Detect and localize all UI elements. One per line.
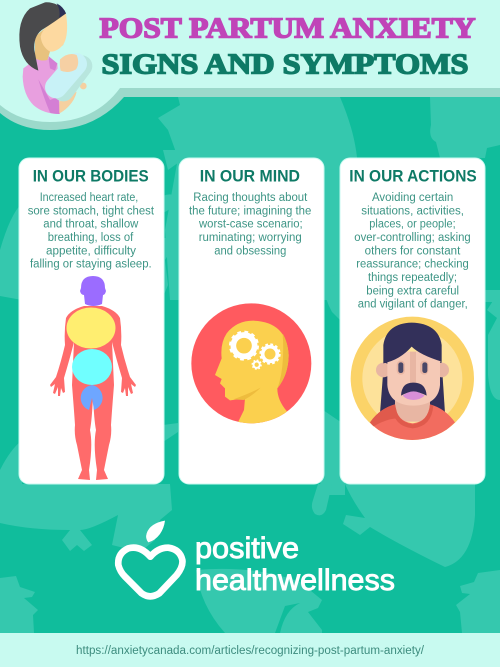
heading: IN OUR ACTIONS: [349, 168, 477, 186]
text block: appetite, difficulty: [46, 245, 136, 257]
text block: things repeatedly;: [368, 272, 457, 284]
gears: [231, 332, 279, 369]
text block: over-controlling; asking: [354, 232, 471, 244]
icon: body chart: [50, 276, 136, 480]
logo: healthwellness: [195, 564, 395, 597]
panel: in our actions: [340, 158, 485, 484]
panel: in our mind: [179, 158, 324, 484]
heading: IN OUR MIND: [200, 168, 300, 186]
text block: [354, 192, 471, 311]
title line 1: POST PARTUM ANXIETY: [100, 14, 475, 45]
text block: the future; imagining the: [189, 205, 311, 217]
text block: places, or people;: [369, 219, 456, 231]
text block: falling or staying asleep.: [30, 259, 152, 271]
text block: others for constant: [365, 245, 461, 257]
logo: [118, 521, 395, 597]
text block: situations, activities,: [361, 205, 464, 217]
text block: breathing, loss of: [48, 232, 134, 244]
text block: [189, 192, 311, 257]
wordmark: positive: [195, 532, 299, 565]
source url: https://anxietycanada.com/articles/recognizing-post-partum-anxiety/: [76, 645, 425, 657]
text block: Racing thoughts about: [193, 192, 308, 204]
header shadow: [0, 0, 500, 130]
icon: head with gears: [191, 303, 311, 425]
title line 2: SIGNS AND SYMPTOMS: [102, 49, 468, 80]
title: [100, 14, 475, 80]
text block: ruminating; worrying: [199, 232, 302, 244]
icon: anxious woman: [351, 317, 474, 445]
footer: [0, 633, 500, 667]
text block: and obsessing: [214, 245, 286, 257]
text block: sore stomach, tight chest: [28, 205, 155, 217]
text block: worst-case scenario;: [198, 219, 303, 231]
text block: reassurance; checking: [356, 259, 469, 271]
heading: IN OUR BODIES: [33, 168, 149, 186]
text block: and throat, shallow: [43, 219, 139, 231]
header panel: [0, 0, 500, 122]
text block: Avoiding certain: [372, 192, 453, 204]
text block: [28, 192, 155, 271]
text block: Increased heart rate,: [40, 192, 138, 204]
pelvis: [81, 385, 103, 410]
chest: [66, 308, 116, 348]
header band: [0, 0, 500, 130]
stomach: [72, 349, 112, 385]
icon: heart with leaf: [118, 521, 182, 596]
icon: mother holding baby: [19, 2, 87, 114]
text block: being extra careful: [366, 285, 459, 297]
text block: and vigilant of danger,: [358, 299, 468, 311]
head and throat: [80, 276, 106, 306]
panel: in our bodies: [19, 158, 164, 484]
